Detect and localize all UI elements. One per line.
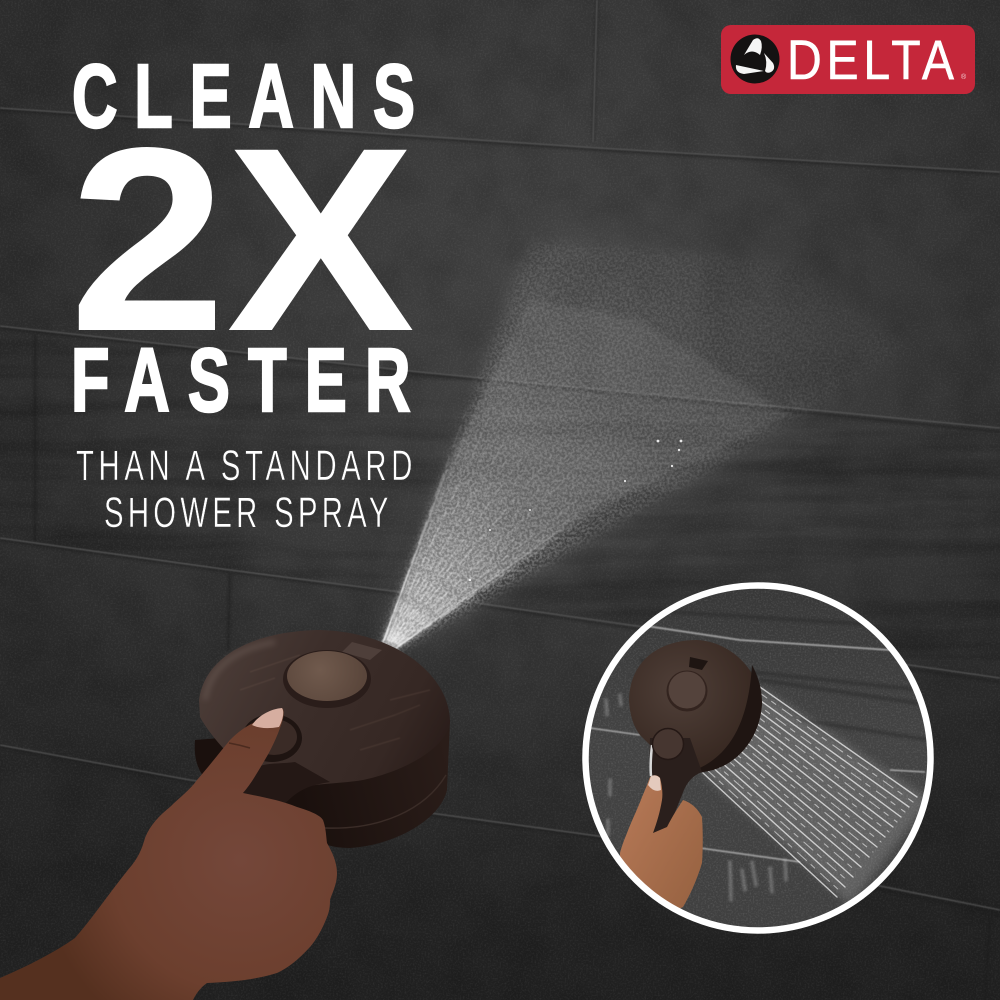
subheading line one: THAN A STANDARD — [76, 441, 417, 489]
hand holding shower head — [0, 708, 337, 1000]
inset selector tab — [689, 657, 708, 670]
logo: Delta red badge — [721, 25, 975, 94]
heading: FASTER: FASTER — [71, 331, 429, 431]
handle neck — [240, 762, 330, 810]
inset thumbnail — [648, 775, 661, 791]
inset hand — [620, 775, 703, 920]
title: cleans 2x faster — [69, 47, 432, 536]
shower head with thumb on button — [0, 630, 450, 1000]
subheading line two: SHOWER SPRAY — [104, 488, 393, 536]
water spray cone — [382, 215, 925, 650]
thumb knuckle crease — [229, 743, 250, 748]
inset white ring — [586, 586, 930, 930]
shower head top face — [199, 630, 450, 797]
shower head side body — [195, 720, 450, 848]
icon: Delta triangle mark — [730, 34, 780, 84]
spray selector tab — [342, 642, 382, 660]
thumbnail — [252, 708, 283, 728]
inset handle — [650, 738, 702, 834]
inset shower head — [629, 640, 762, 834]
inset button — [652, 728, 684, 760]
water droplets — [469, 440, 682, 581]
inset circle: spray close-up — [580, 580, 940, 940]
center dial — [283, 650, 371, 708]
wordmark: DELTA: DELTA — [787, 30, 959, 92]
inset dial — [666, 670, 708, 712]
heading: 2X: 2X — [69, 93, 416, 386]
pause button ring — [242, 714, 302, 762]
inset water jets — [703, 687, 930, 905]
inset wall — [588, 591, 928, 928]
heading: CLEANS: CLEANS — [72, 47, 432, 147]
registered mark: ® — [961, 73, 967, 81]
